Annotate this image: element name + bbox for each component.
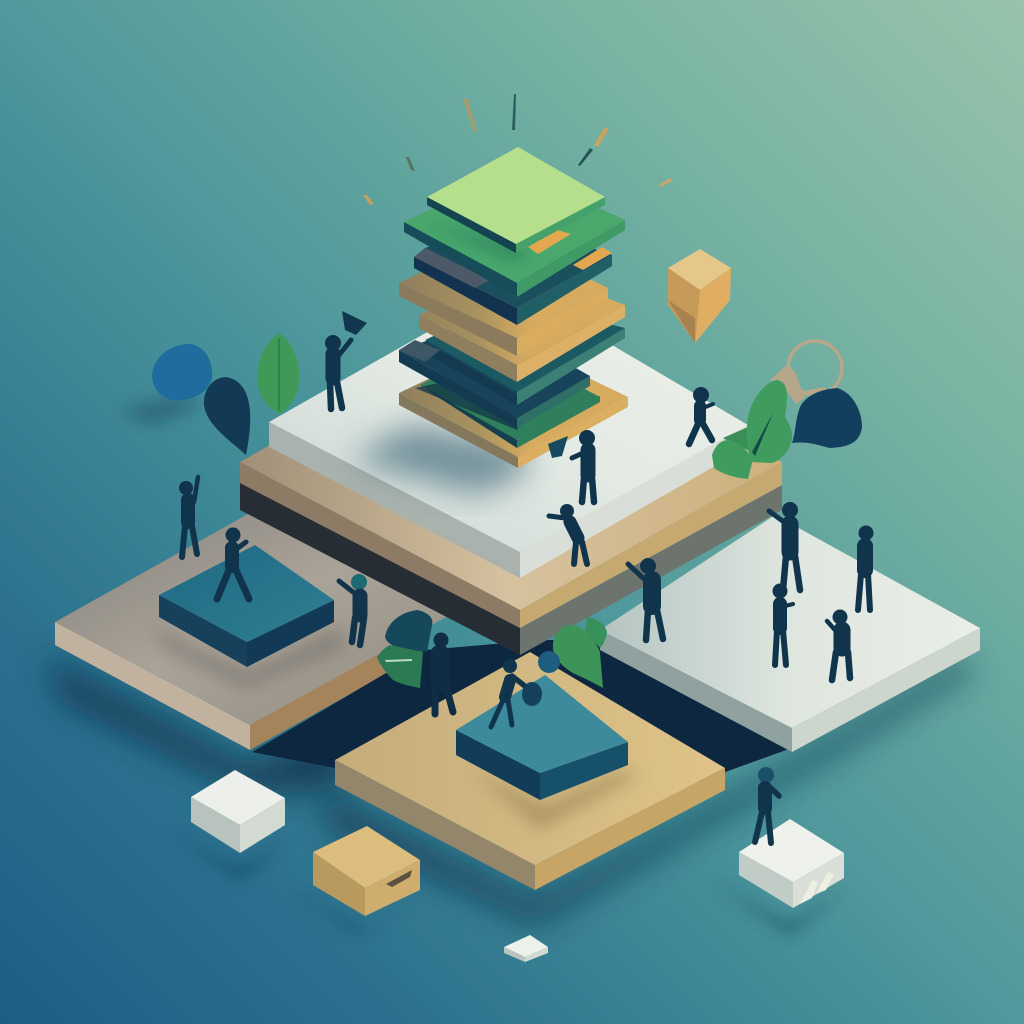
person centre right platform <box>772 584 793 665</box>
layer: tan middle <box>419 265 625 382</box>
icon: green shield <box>538 617 607 688</box>
person at slab edge <box>628 558 663 640</box>
person teal head <box>339 574 367 645</box>
person by tower <box>548 430 595 502</box>
icon: dark leaf <box>204 377 250 455</box>
panel: main stacked platform <box>240 285 782 655</box>
icon: white box right <box>739 819 844 908</box>
person arm raised right platform <box>769 502 800 590</box>
person standing centre <box>434 632 453 714</box>
person seated right platform <box>827 610 850 680</box>
tower of stacked layers <box>399 147 628 468</box>
person with bag on centre box <box>491 659 542 727</box>
layer: orange tab lower <box>573 247 612 270</box>
layer: green second <box>404 170 625 297</box>
person far left <box>179 477 198 557</box>
person bending on platform <box>549 504 587 564</box>
layer: dark teal lower <box>399 320 590 428</box>
layer: orange tab upper <box>528 230 571 254</box>
icon: tan box <box>313 826 420 916</box>
icon: white cube <box>191 770 285 853</box>
sparks above tower <box>363 94 672 205</box>
person far right <box>858 526 874 610</box>
icon: floating gem <box>668 249 731 343</box>
person on white box <box>755 767 779 843</box>
icon: ring and leaves right <box>712 341 862 479</box>
ground shadows <box>45 395 975 935</box>
layer: green <box>415 345 600 448</box>
panel: left platform <box>55 485 495 750</box>
icon: dark and green blobs center left <box>377 610 432 688</box>
panel: left blue box <box>159 545 334 667</box>
panel: center blue box <box>456 675 628 800</box>
layer: top light green <box>427 147 605 253</box>
layer: bottom tan <box>399 340 628 468</box>
panel: bottom tan platform <box>335 652 725 890</box>
dark gap under main slab <box>252 640 800 860</box>
icon: green leaf <box>258 333 299 414</box>
person walking top right <box>689 387 713 444</box>
layer: tan upper <box>399 235 608 356</box>
icon: blue balloon <box>152 344 212 400</box>
panel: right platform <box>600 515 980 752</box>
layer: dark teal upper <box>399 300 625 405</box>
icon: flag <box>342 311 367 335</box>
person on white platform left <box>325 335 351 409</box>
layer: dark navy <box>414 220 612 325</box>
icon: tiny white tile <box>504 935 548 962</box>
person on left blue box <box>217 528 249 599</box>
